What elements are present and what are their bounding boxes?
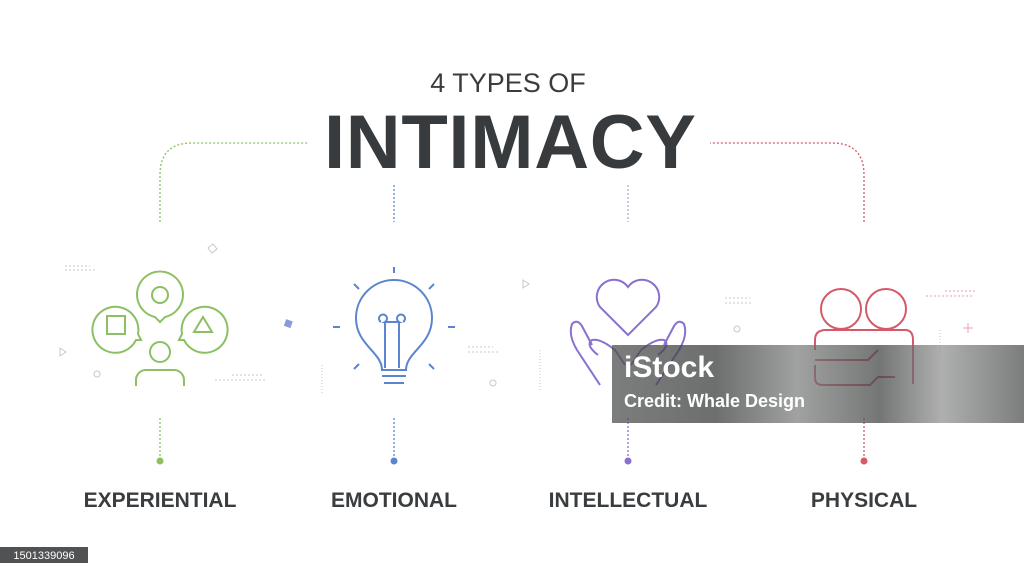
- watermark: iStock: [624, 351, 714, 384]
- labels: [84, 489, 917, 512]
- labels: PHYSICAL: [811, 489, 917, 512]
- icon: experiential: [92, 272, 228, 386]
- labels: INTELLECTUAL: [549, 489, 707, 512]
- watermark: Credit: Whale Design: [624, 391, 805, 411]
- labels: EMOTIONAL: [331, 489, 457, 512]
- connector: green arc: [160, 143, 308, 222]
- icon: emotional lightbulb: [333, 267, 455, 383]
- title: INTIMACY: [324, 100, 696, 185]
- id badge: 1501339096: [13, 550, 75, 562]
- watermark: [612, 345, 1024, 423]
- icon: physical hug: [815, 289, 913, 385]
- dots: [156, 458, 868, 464]
- id badge: [0, 547, 88, 563]
- subtitle: 4 TYPES OF: [430, 68, 586, 98]
- decorations: [60, 244, 975, 395]
- labels: EXPERIENTIAL: [84, 489, 237, 512]
- connector: red arc: [710, 143, 864, 222]
- icon: intellectual heart hands: [571, 280, 685, 385]
- connectors vertical: [160, 185, 864, 458]
